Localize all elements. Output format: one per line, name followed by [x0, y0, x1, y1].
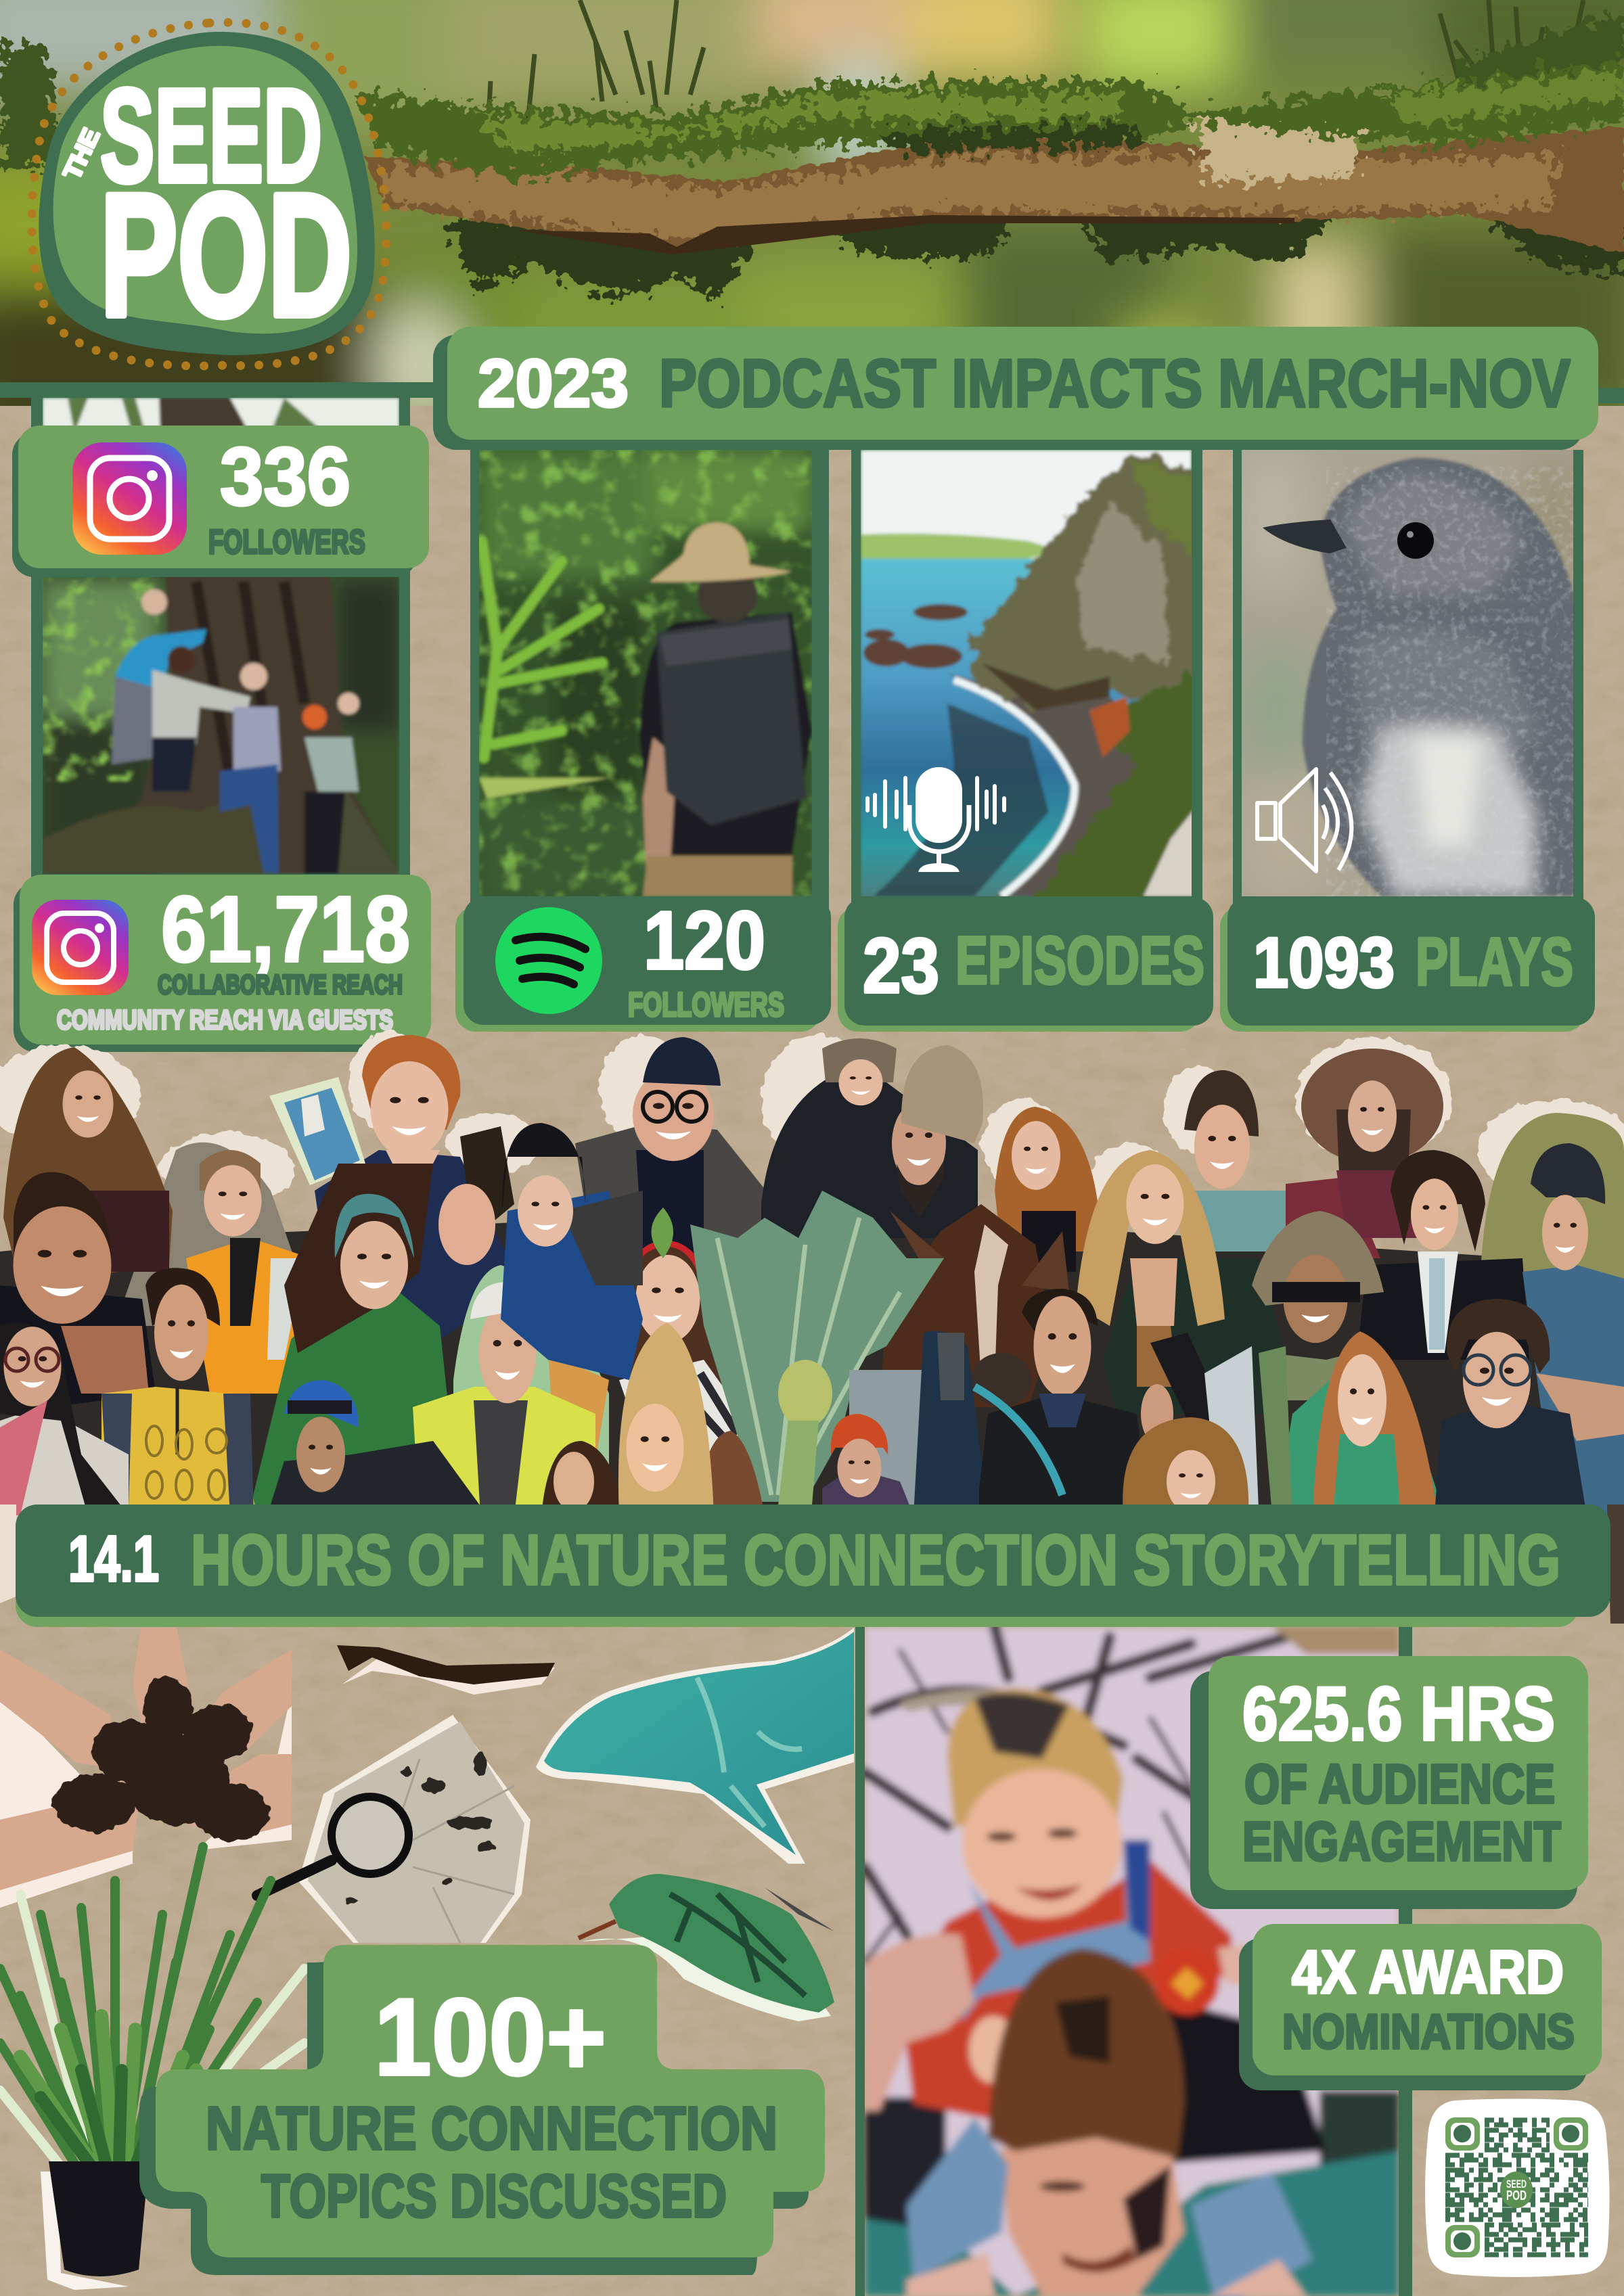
callout: 100+ topics: TOPICS DISCUSSED [261, 2163, 727, 2230]
hi-vis young man with poster [413, 1265, 609, 1522]
instagram followers box [12, 426, 429, 577]
episodes box: EPISODES [955, 923, 1204, 998]
QR centre logo: SEED [1506, 2178, 1527, 2190]
image: centipede [337, 1645, 555, 1695]
callout: award nominations [1239, 1924, 1602, 2090]
green jacket woman [248, 1164, 453, 1515]
cliff [972, 451, 1218, 717]
spotify box: 120 [644, 894, 765, 986]
image: tracking tunnel cards [298, 1715, 531, 1943]
older man glasses [575, 1037, 771, 1272]
logo: The Seed Pod: THE [58, 124, 105, 183]
callout: award nominations: NOMINATIONS [1282, 2005, 1575, 2059]
redhead woman long hair [1259, 1331, 1445, 1515]
column 4: robin photo [1233, 450, 1587, 910]
torn paper halos [0, 1032, 1624, 1218]
woman orange vest [186, 1150, 311, 1394]
woman far left [0, 1323, 129, 1522]
man in beanie right [1522, 1143, 1624, 1522]
instagram reach box: COMMUNITY REACH VIA GUESTS [57, 1005, 393, 1035]
diving man [974, 1289, 1150, 1522]
redhead woman [995, 1107, 1100, 1272]
red-haired man [315, 1035, 521, 1353]
man dark hair and shoulders [1150, 1996, 1326, 2165]
callout: 100+ topics [139, 1945, 825, 2275]
backdrop rubble [115, 1143, 318, 1326]
icon: spotify [495, 907, 602, 1014]
logo: The Seed Pod: SEED [100, 62, 322, 210]
callout: award nominations: 4X AWARD [1292, 1939, 1564, 2006]
child red jumper [900, 1860, 1232, 2124]
plays box: 1093 [1253, 923, 1395, 1003]
header pill [433, 327, 1598, 450]
panel frame: child photo [855, 1627, 1412, 2296]
people collage [0, 1032, 1624, 1529]
beanie girl [501, 1123, 643, 1380]
banner: hours of storytelling [16, 1505, 1610, 1627]
icon: speaker [1257, 769, 1351, 871]
icon: microphone with sound waves [867, 767, 1004, 872]
man blue cap [267, 1380, 487, 1515]
child face [947, 1688, 1123, 1827]
jeans legs [907, 2117, 1008, 2280]
sea background and penguin shape [849, 1331, 988, 1515]
suit man [1359, 1150, 1529, 1360]
header text: 2023 [478, 346, 629, 421]
hanging moss [441, 218, 1624, 308]
camera and hand [438, 1126, 514, 1265]
icon: instagram [72, 442, 187, 555]
instagram reach box: COLLABORATIVE REACH [158, 970, 403, 1000]
instagram followers box: FOLLOWERS [208, 523, 365, 561]
small woman and blonde woman [541, 1323, 765, 1515]
callout: 100+ topics: NATURE CONNECTION [206, 2095, 777, 2163]
book: Birds of New Zealand [269, 1077, 365, 1185]
woman with glasses right [1435, 1299, 1587, 1515]
child hand [969, 2016, 1018, 2084]
icon: instagram small [32, 900, 129, 995]
woman in brown hat [1301, 1049, 1443, 1238]
QR centre logo: POD [1506, 2188, 1527, 2203]
QR code [1425, 2098, 1610, 2277]
banner: hours of storytelling: 14.1 [68, 1523, 159, 1595]
woman red hat [822, 1414, 914, 1515]
episodes box [838, 897, 1213, 1032]
plays box [1220, 897, 1595, 1032]
logo: The Seed Pod: POD [100, 157, 352, 352]
woman long hair [3, 1047, 173, 1285]
QR centre logo [1500, 2172, 1533, 2208]
grass backdrop [1481, 1113, 1624, 1285]
spotify box: FOLLOWERS [628, 986, 784, 1024]
beach and surf [947, 673, 1191, 896]
smiling woman [1177, 1070, 1380, 1258]
cow [880, 1204, 1069, 1407]
overalls [961, 1840, 1150, 2023]
image: potted plant [0, 1847, 304, 2290]
binoculars and hand [1141, 1333, 1259, 1509]
callout: audience engagement [1190, 1656, 1588, 1909]
image: magnifying glass [257, 1797, 409, 1896]
image: green moth [579, 1874, 834, 2021]
image: hands holding soil [0, 1628, 292, 1908]
people hugging tree [115, 629, 206, 690]
header photo: mossy branch [0, 0, 1624, 446]
curly-haired man [1123, 1417, 1248, 1515]
spotify box [455, 894, 831, 1032]
orange flower [1154, 1950, 1219, 2015]
column 2: hiker photo [470, 450, 829, 910]
man with hat and sunglasses [1252, 1211, 1384, 1400]
instagram followers box: 336 [220, 430, 351, 522]
rocks [863, 604, 968, 668]
episodes box: 23 [863, 923, 939, 1009]
man hair [988, 1948, 1184, 2158]
bark [365, 118, 1624, 254]
small leaf [651, 1208, 673, 1258]
logo: The Seed Pod [32, 22, 386, 366]
collard greens [690, 1191, 944, 1505]
instagram reach box: 61,718 [161, 877, 410, 982]
man yellow shirt [102, 1268, 257, 1515]
man in beanie with child [761, 1038, 983, 1238]
dark fill behind people [0, 1211, 1624, 1529]
instagram reach box [14, 875, 431, 1052]
woman with red headband [618, 1241, 771, 1488]
horizontal band under header [0, 382, 1624, 403]
column 3: coast photo [851, 450, 1218, 910]
callout: audience engagement: 625.6 HRS [1242, 1672, 1555, 1756]
adult hands [865, 1933, 974, 2111]
fern [482, 541, 602, 758]
image: dolphin [536, 1628, 854, 1864]
hiker [639, 612, 812, 856]
green slope [1029, 663, 1218, 906]
callout: 100+ topics: 100+ [374, 1976, 606, 2098]
man bottom-left [0, 1172, 156, 1414]
moss on top [0, 41, 1624, 179]
blonde woman [1076, 1150, 1286, 1414]
photo: child on shoulders [865, 1627, 1399, 2296]
man face [1000, 2129, 1184, 2296]
column 1: tree-hug photo [31, 398, 410, 885]
arms [907, 2253, 995, 2296]
left and right margins beside banner [0, 1505, 1624, 1624]
thin grass stems [487, 0, 1606, 118]
callout: audience engagement: OF AUDIENCE [1244, 1753, 1555, 1815]
